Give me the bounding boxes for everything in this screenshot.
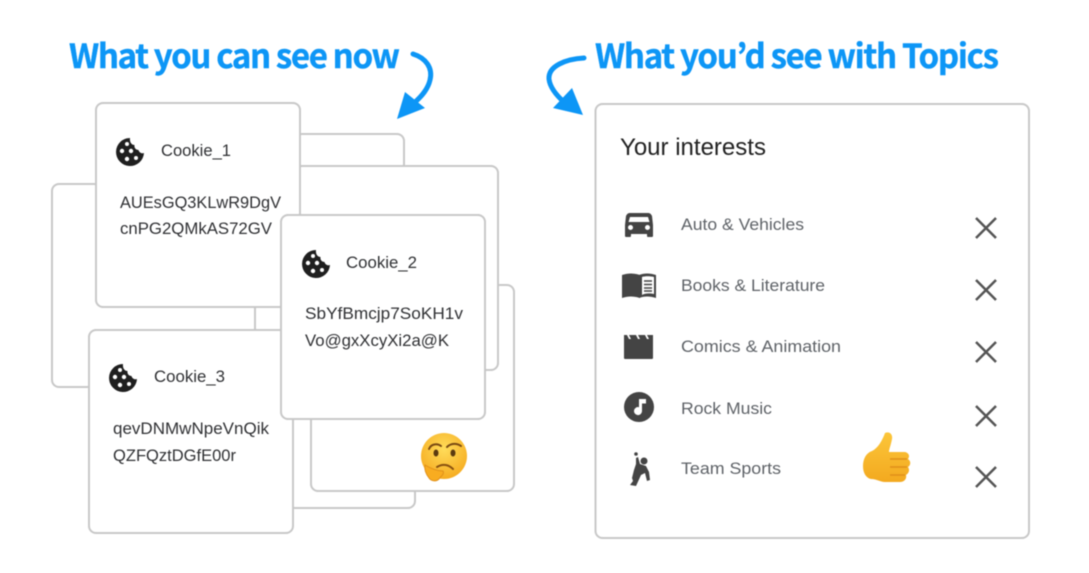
cookie 2 value: Vo@gxXcyXi2a@K [305,332,449,350]
back card: left [52,184,255,387]
remove icon [976,280,996,300]
cookie 2 value [305,305,464,350]
icon: cookie 2 [302,250,330,278]
panel title: Your interests [620,134,766,161]
panel: your interests [596,104,1029,538]
icon: music note [624,392,654,422]
arrow: pointing down to interests panel [549,58,584,115]
label: Comics & Animation [681,337,841,356]
cookie 3 value: qevDNMwNpeVnQik [113,420,270,438]
heading: what you'd see with Topics: What you’d see with Topics [595,30,999,78]
label: Rock Music [681,399,773,418]
icon: car [625,213,653,237]
cookie 3 value: QZFQztDGfE00r [113,447,236,465]
icon: cookie 3 [109,364,137,392]
card: Cookie_2 [281,215,485,419]
arrow: pointing down to cookies [397,54,431,119]
cookie 2 value: SbYfBmcjp7SoKH1v [305,305,464,323]
back card: lower right [311,285,514,491]
remove icon [976,342,996,362]
cookie 1 value: AUEsGQ3KLwR9DgV [120,194,281,212]
row: auto and vehicles [625,213,996,238]
icon: thinking face emoji [421,433,467,481]
remove icon [976,467,996,487]
label: Cookie_3: Cookie_3 [154,368,225,386]
card: Cookie_3 [89,330,293,533]
heading: what you can see now: What you can see now [69,30,400,78]
row: team sports [630,452,996,487]
back card: top centre [201,134,404,337]
label: Cookie_1: Cookie_1 [161,142,231,160]
label: Books & Literature [681,276,825,295]
icon: cookie 1 [116,138,144,166]
row: books and literature [622,274,996,300]
back card: bottom centre [212,305,415,508]
cookie 3 value [113,420,270,465]
label: Auto & Vehicles [681,215,804,234]
panel: stacked cookie cards [52,103,514,533]
icon: athlete [630,452,650,486]
label: Cookie_2: Cookie_2 [346,254,417,272]
icon: clapperboard [624,335,653,359]
cookie 1 value [120,194,281,238]
back card: upper right [295,166,498,370]
cookie 1 value: cnPG2QMkAS72GV [120,220,272,238]
label: Team Sports [681,459,781,478]
icon: thumbs up emoji [863,432,910,482]
row: rock music [624,392,996,426]
card: Cookie_1 [96,103,300,307]
remove icon [976,218,996,238]
row: comics and animation [624,335,996,362]
remove icon [976,406,996,426]
icon: open book [622,274,656,298]
